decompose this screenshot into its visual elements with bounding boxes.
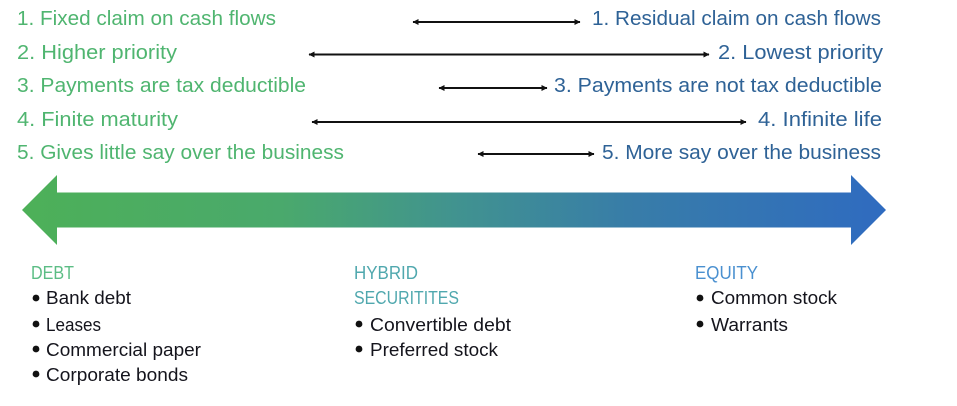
preferred stock: Preferred stock (370, 339, 499, 360)
equity point 2: 2. Lowest priority (718, 42, 883, 64)
debt point 5: 5. Gives little say over the business (17, 142, 344, 164)
equity point 5: 5. More say over the business (602, 142, 881, 164)
debt bullets (33, 295, 39, 377)
debt column (31, 262, 201, 385)
arrow row 2 (309, 54, 709, 56)
equity bullets (697, 295, 703, 327)
equity column (695, 262, 838, 335)
arrow row 5 (478, 153, 594, 155)
hybrid bullets (356, 321, 362, 352)
common stock: Common stock (711, 287, 838, 308)
equity point 4: 4. Infinite life (758, 109, 882, 131)
debt point 3: 3. Payments are tax deductible (17, 75, 306, 97)
warrants: Warrants (711, 314, 788, 335)
arrow row 3 (439, 87, 547, 89)
equity point 1: 1. Residual claim on cash flows (592, 8, 881, 30)
commercial paper: Commercial paper (46, 339, 201, 360)
debt characteristics list (17, 8, 344, 164)
arrow row 1 (413, 21, 580, 23)
comparison arrows (309, 22, 746, 154)
debt heading: DEBT (31, 262, 74, 283)
corporate bonds: Corporate bonds (46, 364, 188, 385)
convertible debt: Convertible debt (370, 314, 511, 335)
hybrid column (354, 262, 511, 360)
equity heading: EQUITY (695, 262, 758, 283)
debt point 1: 1. Fixed claim on cash flows (17, 8, 276, 30)
debt point 4: 4. Finite maturity (17, 109, 178, 131)
bank debt: Bank debt (46, 287, 131, 308)
gradient double-headed spectrum arrow (22, 175, 886, 245)
equity characteristics list (554, 8, 883, 164)
debt point 2: 2. Higher priority (17, 42, 177, 64)
leases: Leases (46, 314, 101, 335)
hybrid heading line 1: HYBRID (354, 262, 418, 283)
hybrid heading line 2: SECURITITES (354, 287, 459, 308)
equity point 3: 3. Payments are not tax deductible (554, 75, 882, 97)
arrow row 4 (312, 121, 746, 123)
